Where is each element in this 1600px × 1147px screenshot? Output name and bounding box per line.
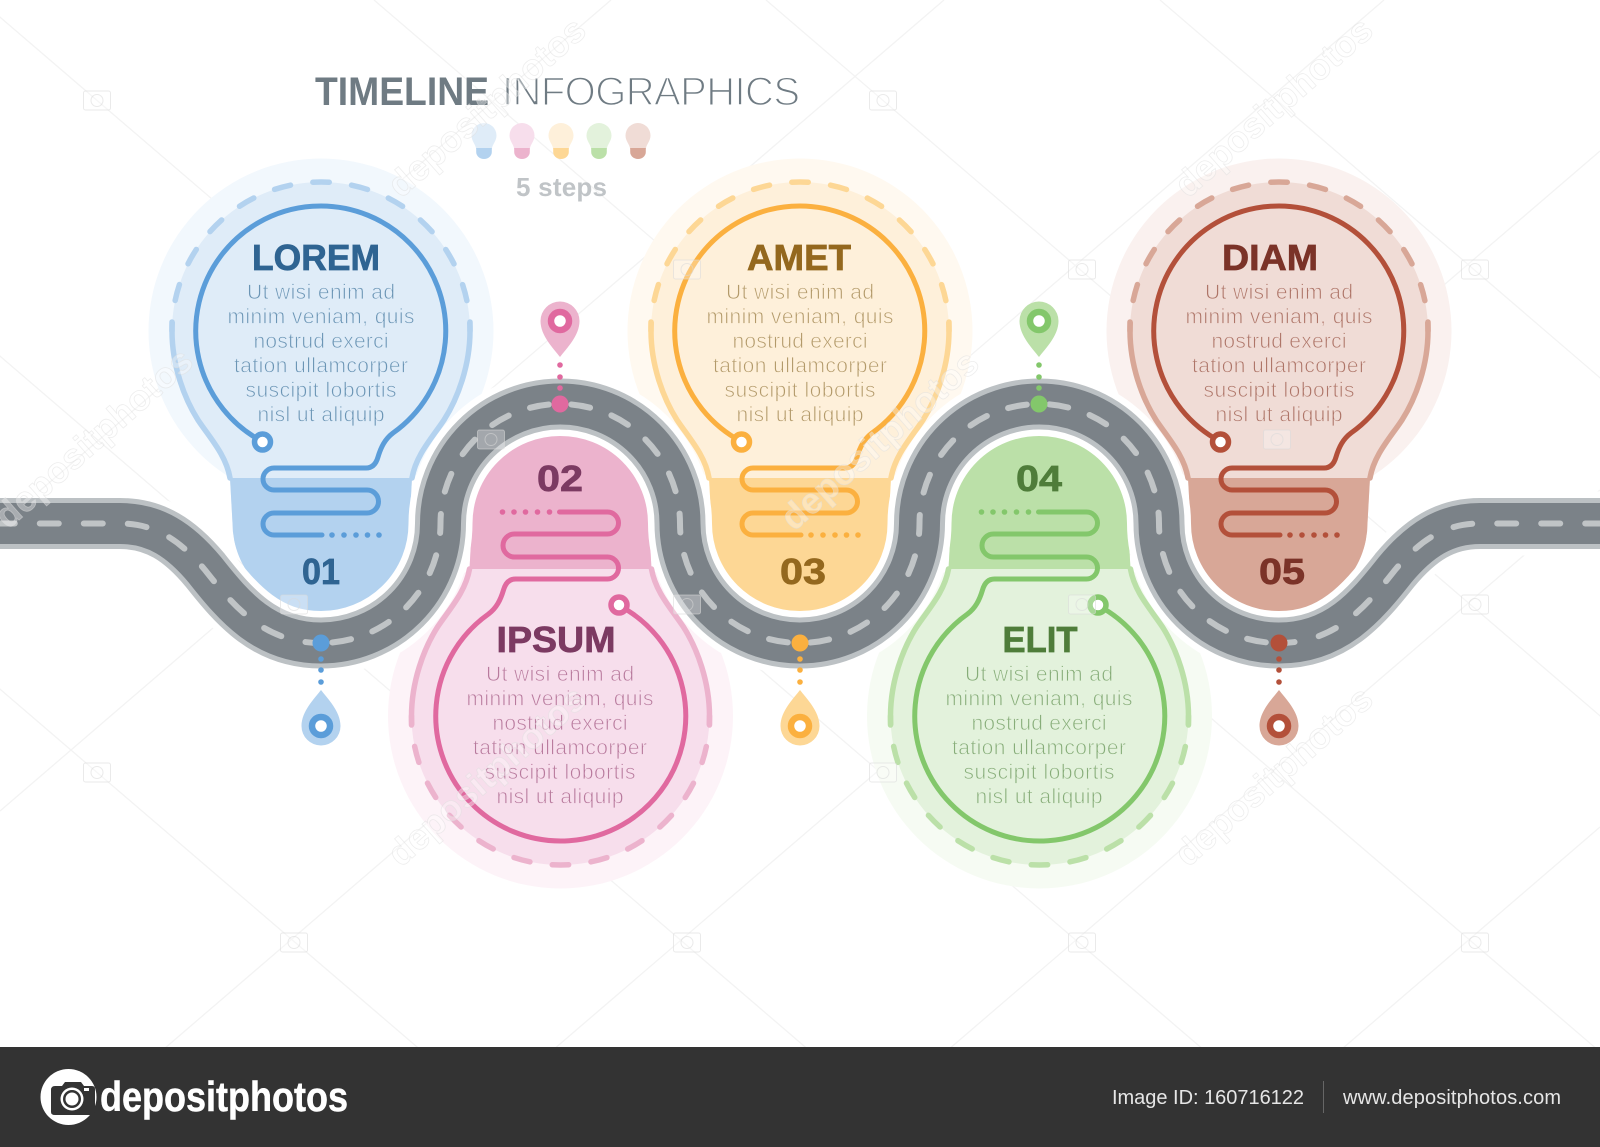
heading: amet: AMET: [747, 237, 851, 278]
heading: diam: DIAM: [1222, 237, 1318, 278]
text block: diam body: nostrud exerci: [1212, 330, 1346, 353]
text block: lorem body: minim veniam, quis: [228, 306, 414, 328]
heading: lorem: LOREM: [252, 237, 380, 278]
text block: ipsum body: Ut wisi enim ad: [486, 663, 634, 686]
map pin: step 5: [1260, 634, 1298, 746]
text block: lorem body: nisl ut aliquip: [258, 404, 384, 426]
bulb 3: [628, 158, 972, 612]
text block: amet body: nisl ut aliquip: [736, 404, 864, 426]
text block: amet body: [706, 281, 894, 426]
map pin: step 1: [302, 634, 340, 746]
panel: step 1 lorem: [148, 158, 494, 612]
watermark overlay: depositphotos: [772, 342, 987, 538]
number: 05: 05: [1259, 551, 1305, 592]
text block: ipsum body: suscipit lobortis: [484, 761, 636, 784]
text block: amet body: suscipit lobortis: [724, 379, 876, 402]
watermark overlay: depositphotos: [379, 9, 594, 205]
bulb 5: [1106, 158, 1452, 612]
number: 02: 02: [537, 458, 583, 499]
text block: ipsum body: nostrud exerci: [492, 712, 628, 735]
text block: lorem body: suscipit lobortis: [246, 379, 396, 402]
text block: diam body: suscipit lobortis: [1204, 379, 1354, 402]
text block: elit body: tation ullamcorper: [952, 736, 1126, 760]
text block: diam body: [1186, 281, 1372, 426]
text block: ipsum body: minim veniam, quis: [466, 688, 654, 710]
text block: amet body: minim veniam, quis: [706, 306, 894, 328]
panel: step 4 elit: [867, 436, 1212, 888]
text block: elit body: nisl ut aliquip: [976, 786, 1102, 808]
text block: ipsum body: [466, 663, 654, 808]
text block: amet body: tation ullamcorper: [713, 354, 887, 378]
bulb 1: [148, 158, 494, 612]
text block: ipsum body: nisl ut aliquip: [496, 786, 624, 808]
number: 04: 04: [1016, 458, 1062, 499]
text block: diam body: minim veniam, quis: [1186, 306, 1372, 328]
text block: elit body: Ut wisi enim ad: [965, 663, 1113, 686]
subtitle: 5 steps: 5 steps: [516, 172, 607, 202]
icon: depositphotos logo: [40, 1069, 96, 1125]
panel: step 3 amet: [628, 158, 972, 612]
text block: amet body: nostrud exerci: [732, 330, 868, 353]
text block: lorem body: [228, 281, 414, 426]
number: 03: 03: [780, 551, 826, 592]
text block: elit body: nostrud exerci: [972, 712, 1106, 735]
text block: lorem body: tation ullamcorper: [234, 354, 408, 378]
heading: timeline infographics: [315, 70, 800, 114]
icon row: five mini bulbs: [472, 123, 650, 159]
map pin: step 2: [540, 302, 580, 412]
watermark overlay: [0, 9, 1488, 952]
text block: elit body: [946, 663, 1132, 808]
text block: elit body: suscipit lobortis: [964, 761, 1114, 784]
bulb 2: [388, 436, 733, 888]
watermark overlay: depositphotos: [1166, 678, 1381, 874]
text block: ipsum body: tation ullamcorper: [473, 736, 647, 760]
brand name: depositphotos: [100, 1073, 348, 1120]
text block: lorem body: Ut wisi enim ad: [247, 281, 395, 304]
watermark overlay: depositphotos: [379, 678, 594, 874]
heading: ipsum: IPSUM: [496, 619, 616, 660]
map pin: step 4: [1020, 302, 1058, 412]
website url: www.depositphotos.com: [1342, 1087, 1561, 1109]
footer bar: [0, 1047, 1600, 1147]
panel: step 5 diam: [1106, 158, 1452, 612]
bulb 4: [867, 436, 1212, 888]
heading: timeline infographics: TIMELINE: [315, 70, 489, 114]
text block: diam body: Ut wisi enim ad: [1205, 281, 1353, 304]
watermark overlay: depositphotos: [1166, 9, 1381, 205]
panel: step 2 ipsum: [388, 436, 733, 888]
heading: elit: ELIT: [1002, 619, 1078, 660]
number: 01: 01: [302, 551, 340, 592]
winding road: [0, 404, 1600, 643]
text block: diam body: tation ullamcorper: [1192, 354, 1366, 378]
map pin: step 3: [780, 634, 820, 746]
heading: timeline infographics: INFOGRAPHICS: [502, 70, 800, 114]
text block: lorem body: nostrud exerci: [254, 330, 388, 353]
text block: diam body: nisl ut aliquip: [1216, 404, 1342, 426]
text block: elit body: minim veniam, quis: [946, 688, 1132, 710]
image id: Image ID: 160716122: [1112, 1087, 1304, 1109]
text block: amet body: Ut wisi enim ad: [726, 281, 874, 304]
